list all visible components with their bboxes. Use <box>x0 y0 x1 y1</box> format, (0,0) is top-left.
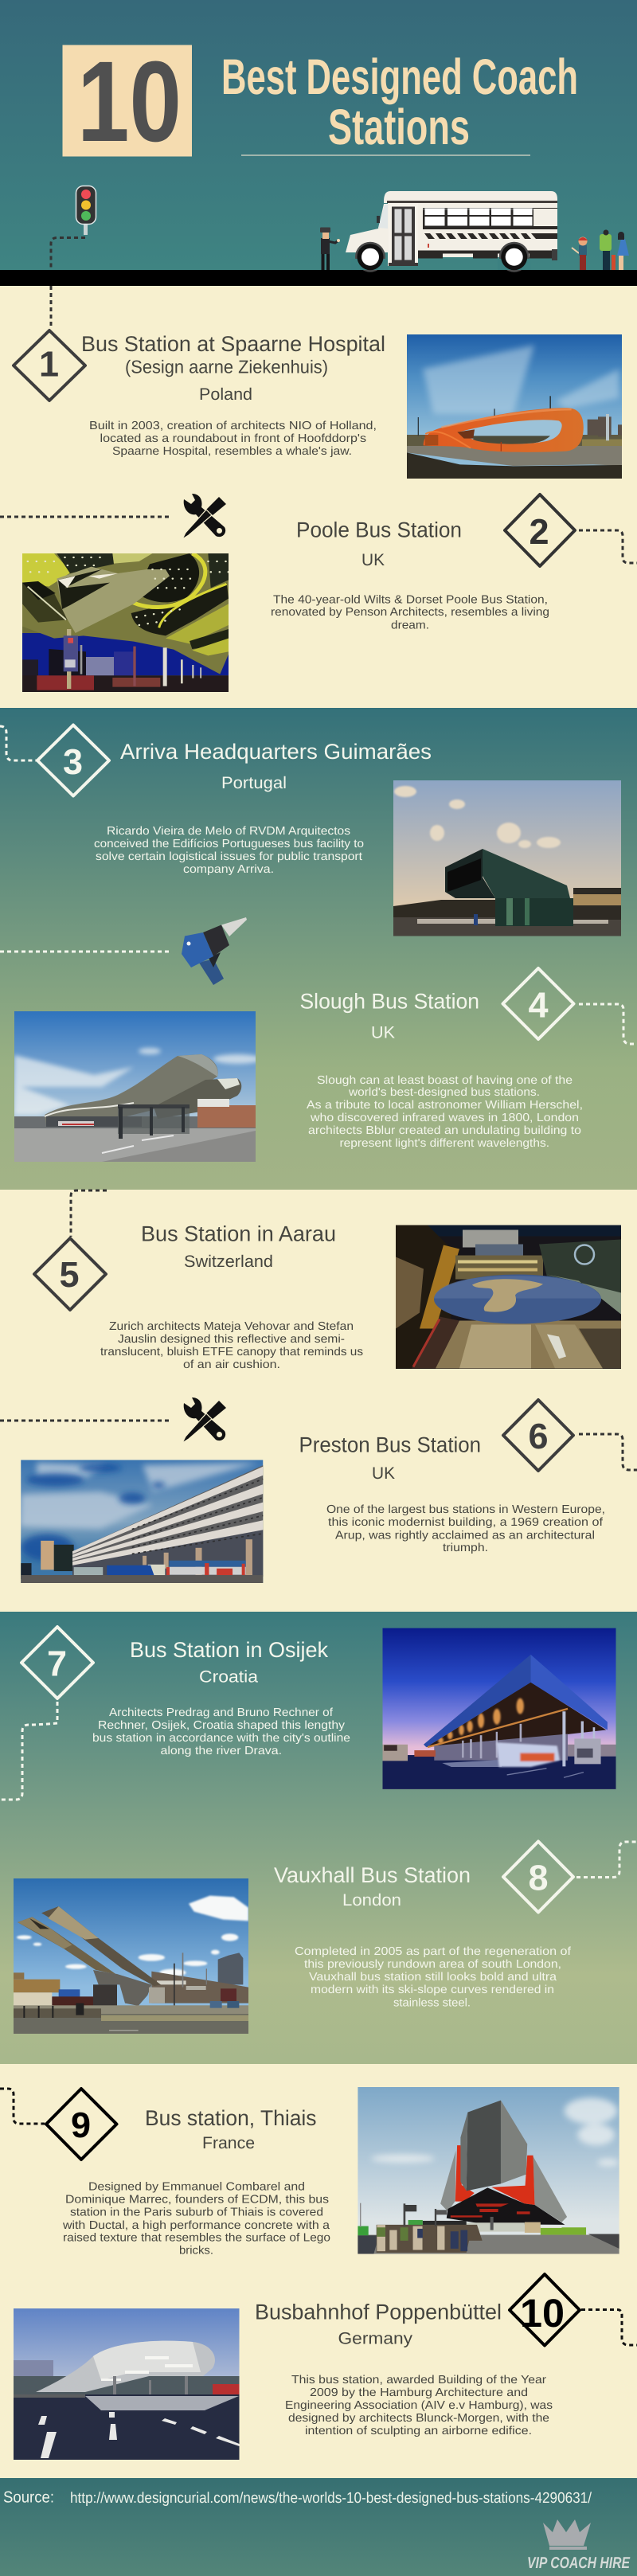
heading 6: UK <box>372 1464 395 1483</box>
section 3 <box>37 725 432 876</box>
text 7: along the river Drava. <box>161 1745 282 1757</box>
text 6: Arup, was rightly acclaimed as an architectural <box>335 1529 595 1542</box>
section 1 <box>14 330 385 458</box>
diamond 4 <box>503 968 573 1039</box>
text 8 <box>295 1945 572 2010</box>
diamond 5: 5 <box>59 1254 80 1295</box>
photo 2 <box>22 553 229 692</box>
icon: tools <box>182 494 226 539</box>
text 1: located as a roundabout in front of Hoofddorp's <box>100 432 366 445</box>
heading 4: UK <box>371 1024 395 1042</box>
text 9: with Ductal, a high performance concrete with a <box>62 2219 330 2232</box>
connector 4 <box>579 1004 637 1044</box>
heading 8: London <box>342 1891 401 1910</box>
heading 8: Vauxhall Bus Station <box>274 1863 471 1887</box>
text 10: Engineering Association (AIV e.v Hamburg), was <box>285 2399 553 2412</box>
text 1: Spaarne Hospital, resembles a whale's jaw. <box>112 445 352 458</box>
text 8: this previously rundown area of south London, <box>304 1958 561 1971</box>
text 10: intention of sculpting an airborne edifice. <box>305 2425 532 2437</box>
text 2: The 40-year-old Wilts & Dorset Poole Bus Station, <box>273 594 548 607</box>
heading 1 <box>81 332 385 404</box>
heading 3: Arriva Headquarters Guimarães <box>120 740 432 764</box>
diamond 9: 9 <box>71 2105 91 2145</box>
heading 1: (Sesign aarne Ziekenhuis) <box>125 357 328 377</box>
diamond 8: 8 <box>528 1857 549 1898</box>
photo 7 <box>382 1628 616 1789</box>
icon: passengers <box>572 229 629 270</box>
text 2 <box>271 594 549 632</box>
section 10 <box>255 2274 580 2437</box>
diamond 2: 2 <box>529 511 549 552</box>
icon: traffic light <box>76 186 96 235</box>
text 9: Dominique Marrec, founders of ECDM, this bus <box>65 2193 329 2206</box>
diamond 5 <box>34 1238 106 1310</box>
diamond 6 <box>503 1400 573 1471</box>
text 7: Rechner, Osijek, Croatia shaped this lengthy <box>98 1719 346 1732</box>
heading 7: Bus Station in Osijek <box>130 1638 328 1662</box>
icon: bus <box>346 191 557 272</box>
heading 7: Croatia <box>199 1667 258 1687</box>
icon: driver <box>320 228 340 270</box>
text 6: this iconic modernist building, a 1969 creation of <box>328 1516 604 1529</box>
text 9: station in the Paris suburb of Thiais is covered <box>70 2206 323 2218</box>
text 3: solve certain logistical issues for public transport <box>96 850 362 863</box>
text 5: translucent, bluish ETFE canopy that reminds us <box>100 1346 363 1358</box>
source line: Source: <box>3 2489 54 2507</box>
diamond 6: 6 <box>528 1416 549 1456</box>
diamond 10 <box>510 2274 580 2346</box>
text 4: represent light's different wavelengths. <box>339 1137 549 1150</box>
photo 3 <box>393 780 621 936</box>
badge: number 10: 10 <box>77 37 182 166</box>
source line: http://www.designcurial.com/news/the-worlds-10-best-designed-bus-stations-4290631/ <box>70 2490 592 2507</box>
photo 8 <box>14 1878 248 2034</box>
section 4 <box>299 968 583 1150</box>
text 4 <box>307 1074 583 1150</box>
connector 8 <box>576 1842 637 1878</box>
text 5: of an air cushion. <box>183 1358 280 1371</box>
text 2: renovated by Penson Architects, resembles a living <box>271 606 549 619</box>
heading 2: Poole Bus Station <box>296 518 462 541</box>
text 6: triumph. <box>443 1542 488 1554</box>
text 9 <box>62 2180 330 2257</box>
heading 6: Preston Bus Station <box>299 1433 481 1457</box>
text 5: Jauslin designed this reflective and semi- <box>118 1333 345 1346</box>
connector 3 top <box>0 726 37 760</box>
text 8: modern with its ski-slope curves rendered in <box>311 1984 554 1996</box>
connector 9 <box>0 2089 45 2124</box>
heading 5: Bus Station in Aarau <box>141 1222 336 1245</box>
photo 9 <box>358 2087 619 2254</box>
text 10: This bus station, awarded Building of the Year <box>291 2374 546 2386</box>
text 9: raised texture that resembles the surface of Lego <box>63 2231 330 2244</box>
diamond 3 <box>37 725 109 796</box>
diamond 10: 10 <box>520 2291 565 2336</box>
section 5 <box>34 1222 363 1371</box>
photo 1 <box>407 334 622 479</box>
diamond 1: 1 <box>39 344 59 384</box>
text 3 <box>94 825 364 876</box>
diamond 1 <box>14 330 85 401</box>
logo: VIP Coach Hire <box>527 2519 631 2572</box>
text 4: As a tribute to local astronomer William Herschel, <box>307 1099 583 1112</box>
text 10: designed by architects Blunck-Morgen, with the <box>288 2412 549 2425</box>
text 9: Designed by Emmanuel Combarel and <box>88 2180 305 2193</box>
heading 4 <box>299 989 479 1042</box>
heading 2: UK <box>361 551 385 569</box>
photo 6 <box>21 1460 263 1583</box>
section 7 <box>21 1627 350 1757</box>
diamond 7: 7 <box>47 1644 67 1683</box>
connector: dotted to tools <box>0 1419 169 1422</box>
heading 9 <box>145 2106 317 2152</box>
diamond 4: 4 <box>528 984 549 1026</box>
title: Stations <box>328 100 470 155</box>
icon: drill <box>182 917 247 985</box>
text 7: bus station in accordance with the city's outline <box>92 1732 350 1745</box>
text 8: Vauxhall bus station still looks bold and ultra <box>309 1971 557 1984</box>
heading 9: Bus station, Thiais <box>145 2106 317 2130</box>
text 8: Completed in 2005 as part of the regeneration of <box>295 1945 572 1958</box>
text 3: Ricardo Vieira de Melo of RVDM Arquitectos <box>107 825 350 838</box>
text 5: Zurich architects Mateja Vehovar and Stefan <box>109 1320 354 1333</box>
heading 5 <box>141 1222 336 1271</box>
connector 6 <box>579 1434 637 1470</box>
photo 5 <box>396 1225 621 1369</box>
text 10 <box>285 2374 553 2437</box>
text 4: Slough can at least boast of having one of the <box>317 1074 573 1087</box>
heading 1: Poland <box>199 385 252 404</box>
heading 1: Bus Station at Spaarne Hospital <box>81 332 385 356</box>
heading 7 <box>130 1638 328 1687</box>
heading 10 <box>255 2300 502 2347</box>
heading 10: Germany <box>338 2330 413 2347</box>
connector 10 <box>581 2309 637 2345</box>
heading 10: Busbahnhof Poppenbüttel <box>255 2300 502 2324</box>
text 3: conceived the Edifícios Portugueses bus facility to <box>94 838 364 850</box>
connector 2 <box>579 530 637 563</box>
text 7 <box>92 1706 350 1757</box>
heading 3 <box>120 740 432 792</box>
text 7: Architects Predrag and Bruno Rechner of <box>109 1706 334 1719</box>
photo 4 <box>14 1011 256 1162</box>
section 6 <box>299 1400 605 1554</box>
connector: dotted to tools <box>0 516 169 518</box>
diamond 8 <box>503 1841 573 1913</box>
text 1 <box>89 420 377 458</box>
text 5 <box>100 1320 363 1371</box>
section 2 <box>271 494 575 632</box>
diamond 3: 3 <box>63 741 83 782</box>
text 9: bricks. <box>179 2244 213 2257</box>
diamond 7 <box>21 1627 93 1698</box>
section 8 <box>274 1841 573 2010</box>
text 4: world's best-designed bus stations. <box>348 1086 540 1099</box>
heading 6 <box>299 1433 481 1483</box>
section 9 <box>46 2089 330 2257</box>
text 3: company Arriva. <box>183 863 274 876</box>
text 8: stainless steel. <box>393 1997 471 2010</box>
heading 8 <box>274 1863 471 1910</box>
connector 7 <box>0 1702 57 1800</box>
connector 5 top <box>71 1190 107 1237</box>
text 1: Built in 2003, creation of architects NIO of Holland, <box>89 420 377 432</box>
heading 3: Portugal <box>221 774 287 792</box>
text 4: architects Bblur created an undulating building to <box>308 1124 581 1137</box>
text 10: 2009 by the Hamburg Architecture and <box>310 2386 528 2399</box>
heading 4: Slough Bus Station <box>299 989 479 1013</box>
heading 2 <box>296 518 462 569</box>
heading 5: Switzerland <box>184 1253 273 1271</box>
connector: header dotted path <box>51 237 85 327</box>
title <box>221 49 578 156</box>
diamond 9 <box>46 2089 116 2160</box>
diamond 2 <box>505 494 575 566</box>
text 4: who discovered infrared waves in 1800, London <box>310 1112 579 1124</box>
connector: dotted to drill <box>0 951 170 952</box>
text 6: One of the largest bus stations in Western Europe, <box>326 1503 605 1516</box>
icon: tools <box>182 1397 226 1443</box>
heading 9: France <box>202 2134 255 2152</box>
photo 10 <box>14 2308 239 2460</box>
road <box>0 270 637 286</box>
text 2: dream. <box>391 620 429 632</box>
text 6 <box>326 1503 605 1554</box>
